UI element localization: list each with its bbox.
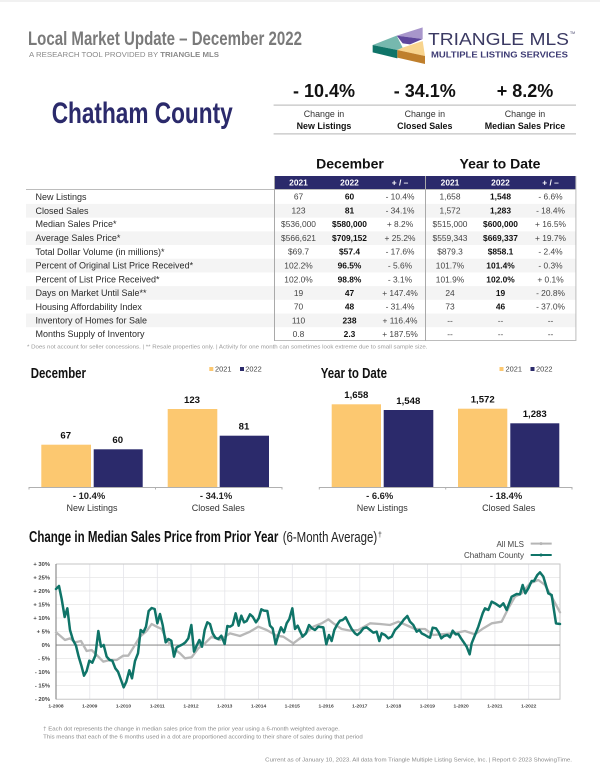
row: Average Sales Price: + 19.7% [535,233,567,243]
row: Inventory of Homes for Sale [36,315,553,325]
row: Housing Affordability Index [36,302,565,312]
stat: new listings [293,81,355,131]
row: Closed Sales: 1,572 [440,206,461,216]
chart heading: Year to Date: Year to Date [321,366,387,382]
legend: 2022 [245,365,262,374]
y axis labels: - 15% [35,684,50,690]
y axis labels: - 20% [35,697,50,703]
row: Percent of Original List Price Received: 101.7% [436,260,465,270]
x axis labels: 1-2013 [217,704,233,710]
row: New Listings [36,192,563,202]
line chart legend: Chatham County [464,551,524,560]
logo: Triangle MLS: TM [570,31,575,35]
bars: New Listings: 60 [112,435,123,446]
table header row: 2022 [491,178,510,188]
y axis labels [33,562,50,703]
row: Median Sales Price: $580,000 [332,219,367,229]
table header row: + / – [542,178,559,188]
table header row: + / – [392,178,409,188]
row: Median Sales Price: $536,000 [281,219,316,229]
table header row: 2022 [340,178,359,188]
row: Total Dollar Volume: $879.3 [437,247,463,257]
bars: New Listings: 1,548 [396,396,421,407]
row: Total Dollar Volume: $57.4 [339,247,360,257]
row: Days on Market Until Sale: - 20.8% [536,288,565,298]
row: Percent of Original List Price Received: 96.5% [338,260,362,270]
bars: New Listings: 1,658 [344,390,369,401]
row: Percent of List Price Received [36,274,564,284]
dagger mark: † [378,532,382,539]
row: Months Supply of Inventory: 0.8 [293,329,305,339]
bars: New Listings [332,390,433,487]
row: Days on Market Until Sale: Days on Market Until Sale** [36,288,147,298]
x axis labels: 1-2020 [453,704,469,710]
row: Inventory of Homes for Sale: 238 [343,315,357,325]
row: Closed Sales: 81 [345,206,354,216]
row: Median Sales Price: $515,000 [433,219,468,229]
stat: median sales price: Change in [505,109,545,119]
heading: Chatham County: Chatham County [52,97,233,130]
x axis labels: 1-2009 [82,704,98,710]
row: Closed Sales [36,206,565,216]
table header row: 2021 [289,178,308,188]
row: Total Dollar Volume [36,247,563,257]
category label: New Listings: New Listings [66,503,118,513]
row: New Listings: 60 [345,192,354,202]
row: Median Sales Price: + 16.5% [535,219,567,229]
table heading: December: December [316,156,384,172]
row: Months Supply of Inventory: + 187.5% [382,329,418,339]
bars: Closed Sales: 123 [184,395,200,406]
line chart legend: All MLS [496,540,524,549]
table header row [289,178,559,188]
row: Housing Affordability Index: 73 [445,302,455,312]
row: Average Sales Price: $566,621 [281,233,316,243]
title: Local Market Update – December 2022 [28,28,302,50]
logo: Triangle MLS: TRIANGLE MLS [428,29,569,49]
row: Percent of List Price Received: 101.9% [436,274,465,284]
x axis labels: 1-2010 [116,704,131,710]
bars: Closed Sales: 1,283 [523,409,547,420]
x axis labels [48,704,537,710]
stat: new listings: - 10.4% [293,81,355,101]
category label: New Listings [66,490,118,513]
row: Percent of List Price Received: Percent of List Price Received* [36,274,160,284]
row: Closed Sales: 123 [292,206,306,216]
row: Total Dollar Volume: $858.1 [488,247,514,257]
row: Months Supply of Inventory: -- [548,329,553,339]
row: New Listings: New Listings [36,192,87,202]
category label: New Listings: - 10.4% [73,490,106,501]
stat: closed sales: Change in [405,109,445,119]
row: Average Sales Price: $709,152 [332,233,367,243]
category label: New Listings: New Listings [357,503,408,513]
x axis labels: 1-2022 [521,704,537,710]
row: Percent of Original List Price Received: Percent of Original List Price Received* [36,260,194,270]
row: New Listings: 67 [294,192,303,202]
category label: Closed Sales [192,490,245,513]
table header row: 2021 [441,178,460,188]
row: Percent of Original List Price Received: - 5.6% [388,260,413,270]
axis [319,488,572,490]
x axis labels: 1-2018 [386,704,401,710]
bars: New Listings [41,430,143,487]
row: Average Sales Price: Average Sales Price* [36,233,121,243]
table heading: Year to Date: Year to Date [460,156,541,172]
y axis labels: + 25% [33,576,50,582]
logo: Triangle MLS: MULTIPLE LISTING SERVICES [431,49,568,59]
row: Median Sales Price [36,219,567,229]
subtitle: A RESEARCH TOOL PROVIDED BY TRIANGLE MLS [29,50,219,59]
row: New Listings: - 6.6% [538,192,563,202]
row: Closed Sales: 1,283 [490,206,511,216]
y axis labels: + 30% [33,562,50,568]
y axis labels: + 15% [33,602,50,608]
row: New Listings: 1,548 [490,192,511,202]
row: Percent of List Price Received: + 0.1% [537,274,564,284]
row: Housing Affordability Index: - 31.4% [386,302,415,312]
bars: Closed Sales [168,395,269,487]
line chart heading qualifier: (6-Month Average) [283,530,377,546]
row: Days on Market Until Sale: 24 [445,288,455,298]
row: Percent of List Price Received: 98.8% [338,274,362,284]
row: Housing Affordability Index: - 37.0% [536,302,565,312]
row: Months Supply of Inventory: -- [447,329,453,339]
legend [209,365,262,374]
y axis labels: - 5% [38,656,50,662]
x axis labels: 1-2016 [318,704,334,710]
chart footnote: This means that each of the 6 months used in a dot are proportioned according to their share of sales during that period [43,734,363,740]
stat: closed sales [394,81,456,131]
row: Days on Market Until Sale: 19 [496,288,505,298]
row: Months Supply of Inventory: -- [498,329,503,339]
legend [500,365,552,374]
logo: Triangle MLS [373,27,575,64]
row: Median Sales Price: Median Sales Price* [36,219,117,229]
row: Median Sales Price: $600,000 [483,219,518,229]
stat: closed sales: - 34.1% [394,81,456,101]
line chart legend [464,540,552,560]
chart footnote [43,726,363,740]
row: Percent of Original List Price Received: - 0.3% [538,260,563,270]
series: Chatham County [56,572,560,687]
panel: December bar chart [29,365,282,513]
x axis labels: 1-2011 [150,704,165,710]
row: Housing Affordability Index: 48 [345,302,354,312]
row: Closed Sales: Closed Sales [36,206,89,216]
row: Days on Market Until Sale: 19 [294,288,303,298]
line chart: change in median sales price [33,562,560,710]
stat: median sales price: + 8.2% [497,81,553,101]
category label: New Listings: - 6.6% [366,490,394,501]
stat: new listings: Change in [304,109,344,119]
category label: New Listings [357,490,408,513]
row: Percent of List Price Received: 102.0% [486,274,515,284]
legend: 2021 [506,365,522,374]
axis [29,488,282,490]
row: Average Sales Price: $559,343 [433,233,468,243]
y axis labels: + 5% [37,630,50,636]
row: Percent of Original List Price Received [36,260,563,270]
row: Closed Sales: - 34.1% [386,206,415,216]
row: Total Dollar Volume: - 2.4% [538,247,563,257]
row: Median Sales Price: + 8.2% [387,219,414,229]
row: Days on Market Until Sale: 47 [345,288,354,298]
y axis labels: - 10% [35,670,50,676]
row: Percent of List Price Received: - 3.1% [388,274,413,284]
series: All MLS [56,580,560,662]
category label: Closed Sales: - 34.1% [200,490,233,501]
row: New Listings: - 10.4% [386,192,415,202]
y axis labels: + 20% [33,589,50,595]
category label: Closed Sales [482,490,536,513]
row: Inventory of Homes for Sale: -- [498,315,503,325]
row: Average Sales Price [36,233,567,243]
bars: Closed Sales: 81 [239,422,250,432]
bars: Closed Sales: 1,572 [471,394,495,406]
key stats panel [274,81,576,134]
x axis labels: 1-2021 [487,704,503,710]
category label: Closed Sales: Closed Sales [192,503,245,513]
row: Total Dollar Volume: Total Dollar Volume (in millions)* [36,247,165,257]
row: Percent of List Price Received: 102.0% [284,274,313,284]
y axis labels: + 10% [33,616,50,622]
stat: closed sales: Closed Sales [397,121,452,131]
row: Inventory of Homes for Sale: Inventory of Homes for Sale [36,315,147,325]
row: New Listings: 1,658 [440,192,461,202]
panel: Year to Date bar chart [319,365,572,513]
row: Housing Affordability Index: Housing Affordability Index [36,302,142,312]
row: Housing Affordability Index: 70 [294,302,303,312]
x axis labels: 1-2019 [420,704,435,710]
x axis labels: 1-2015 [285,704,300,710]
bars: New Listings: 67 [60,430,71,442]
row: Inventory of Homes for Sale: + 116.4% [382,315,418,325]
line chart heading: Change in Median Sales Price from Prior Year [29,529,278,546]
row: Days on Market Until Sale: + 147.4% [382,288,418,298]
row: Months Supply of Inventory: 2.3 [344,329,356,339]
row: Housing Affordability Index: 46 [496,302,505,312]
row: Days on Market Until Sale [36,288,565,298]
data table [26,176,576,341]
row: Percent of Original List Price Received: 102.2% [284,260,313,270]
page footer: Current as of January 10, 2023. All data from Triangle Multiple Listing Service, Inc. | Report © 2023 ShowingTime. [265,756,572,764]
row: Average Sales Price: + 25.2% [385,233,416,243]
row: Average Sales Price: $669,337 [483,233,518,243]
stat: new listings: New Listings [297,121,351,131]
row: Total Dollar Volume: - 17.6% [386,247,415,257]
chart footnote: † Each dot represents the change in median sales price from the prior year using a 6-month weighted average. [43,726,340,732]
row: Months Supply of Inventory: Months Supply of Inventory [36,329,145,339]
row: Inventory of Homes for Sale: -- [548,315,553,325]
legend: 2021 [215,365,231,374]
x axis labels: 1-2012 [183,704,199,710]
x axis labels: 1-2008 [48,704,64,710]
row: Total Dollar Volume: $69.7 [288,247,309,257]
x axis labels: 1-2014 [251,704,266,710]
row: Percent of Original List Price Received: 101.4% [486,260,515,270]
stat: median sales price [485,81,565,131]
row: Inventory of Homes for Sale: -- [447,315,453,325]
x axis labels: 1-2017 [352,704,368,710]
row: Closed Sales: - 18.4% [536,206,565,216]
bars: Closed Sales [458,394,559,487]
row: Months Supply of Inventory [36,329,553,339]
category label: Closed Sales: - 18.4% [490,490,523,501]
y axis labels: 0% [42,643,50,649]
table footnote: * Does not account for seller concessions. | ** Resale properties only. | Activity for one month can sometimes look extreme due to small sample size. [27,344,428,350]
chart heading: December: December [31,366,86,382]
stat: median sales price: Median Sales Price [485,121,565,131]
category label: Closed Sales: Closed Sales [482,503,536,513]
legend: 2022 [536,365,552,374]
row: Inventory of Homes for Sale: 110 [292,315,306,325]
